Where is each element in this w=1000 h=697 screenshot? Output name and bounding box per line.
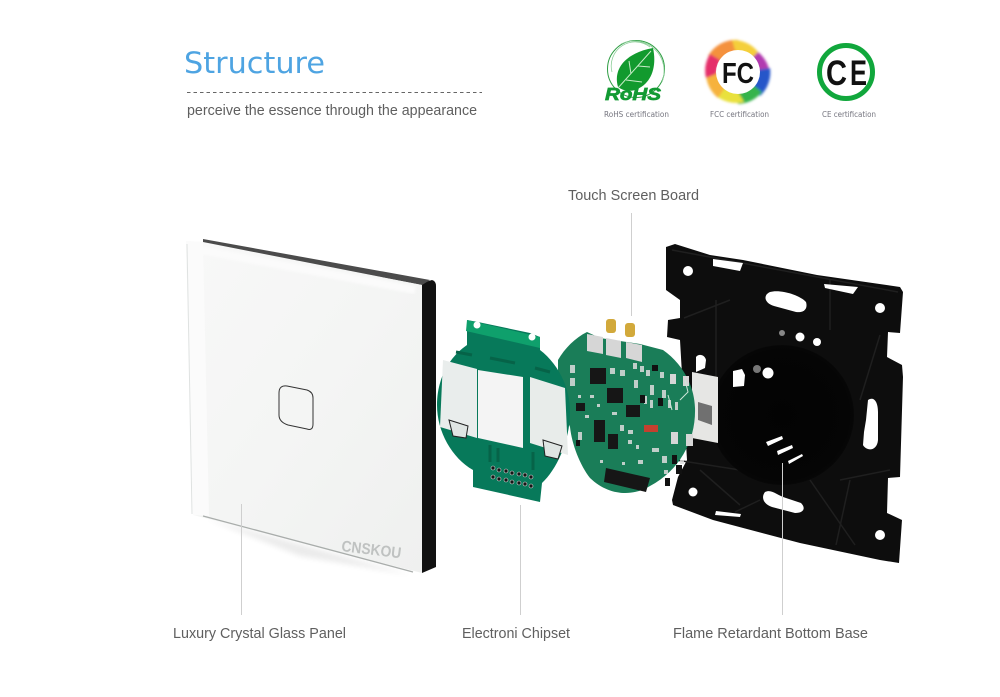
icon: CE certification: E [850, 54, 867, 93]
glass top edge [203, 239, 430, 285]
panel: electronic chipset [437, 320, 570, 502]
glass face [186, 241, 422, 573]
base slots and holes [683, 259, 885, 540]
gold terminals [606, 319, 635, 337]
dark traces on the board [456, 352, 550, 470]
leader line: glass panel [240, 504, 242, 615]
leader line: base [782, 463, 784, 615]
label: chipset: Electroni Chipset [462, 626, 570, 642]
glass side edge [422, 280, 436, 573]
title: Structure [184, 46, 325, 80]
icon: RoHS certification: RoHS [605, 84, 661, 104]
ribs [672, 250, 898, 545]
leader line: Touch Screen Board [630, 213, 632, 316]
label: glass panel: Luxury Crystal Glass Panel [173, 626, 346, 642]
icon: CE certification: C [826, 54, 847, 93]
label: FCC certification: FCC certification [710, 110, 769, 119]
connector pads [491, 466, 533, 488]
small components [570, 363, 684, 474]
chips [576, 368, 650, 492]
icon: CE certification [820, 46, 872, 98]
icon: FCC certification: FC [722, 58, 754, 90]
red component [644, 425, 658, 432]
label: Touch Screen Board: Touch Screen Board [568, 188, 699, 204]
leader line: chipset [520, 505, 522, 615]
label: CE certification: CE certification [822, 110, 876, 119]
label: base: Flame Retardant Bottom Base [673, 626, 868, 642]
solder tabs [449, 420, 468, 438]
label: RoHS certification: RoHS certification [604, 110, 669, 119]
icon: FCC certification [705, 40, 770, 104]
subtitle: perceive the essence through the appearance [187, 103, 477, 119]
white pads [587, 334, 693, 446]
panel: crystal glass [186, 239, 436, 575]
subtitle divider [187, 92, 482, 94]
socket well [710, 345, 854, 485]
panel: touch screen board [558, 319, 695, 493]
brand: CNSKOU [341, 538, 402, 562]
white shields [440, 360, 477, 438]
icon: RoHS certification [605, 40, 664, 104]
connector block [692, 372, 718, 443]
touch button [279, 386, 313, 429]
panel: bottom base [666, 244, 903, 563]
